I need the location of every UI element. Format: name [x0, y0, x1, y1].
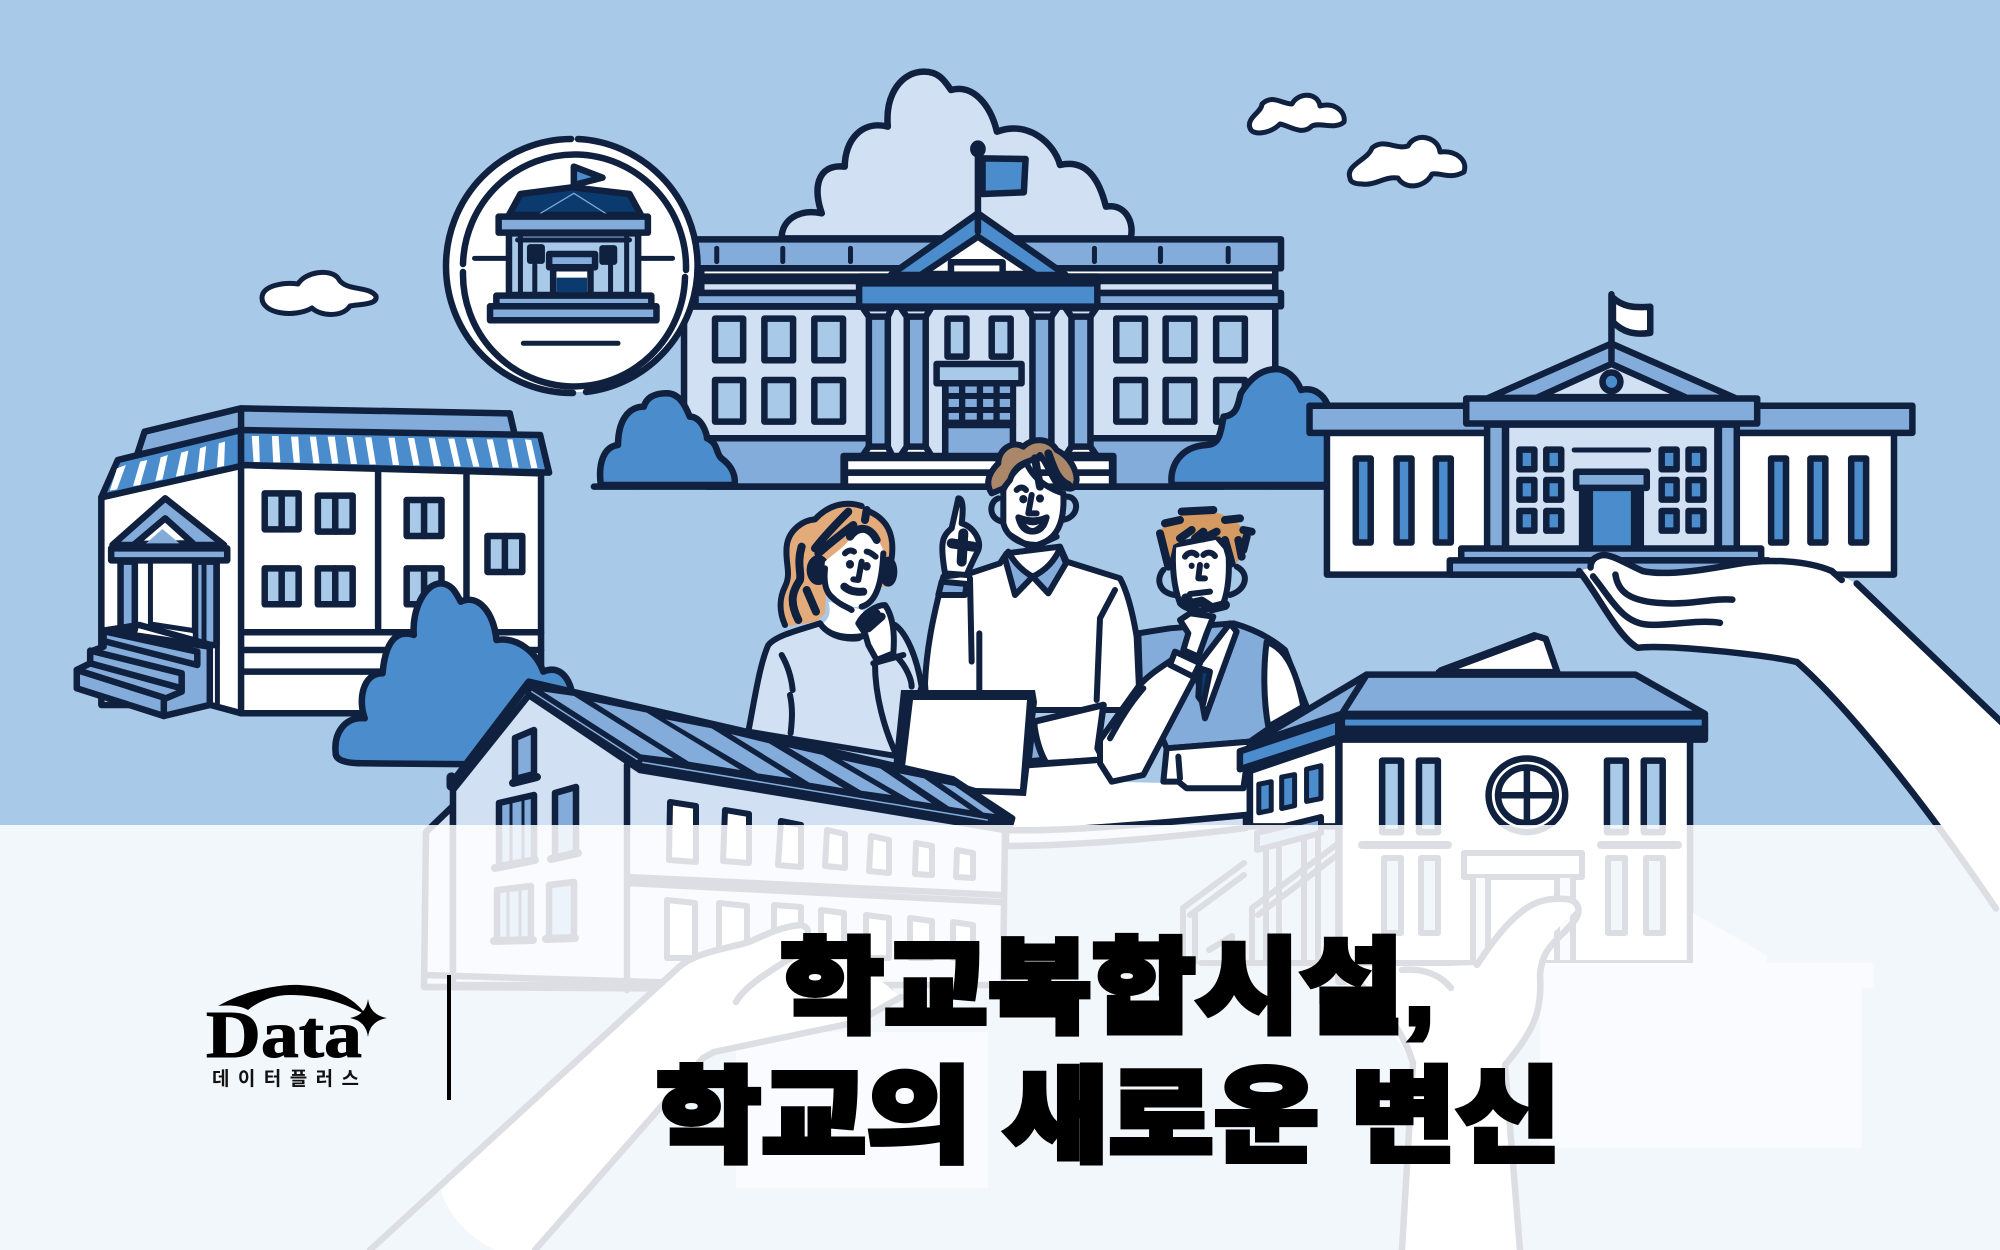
flag [973, 144, 1026, 213]
man cuff [938, 582, 967, 595]
woman hair outline [781, 504, 892, 625]
woman ears [810, 558, 894, 584]
hand left lower [370, 925, 901, 1250]
pale panels under band [736, 913, 1874, 1188]
side windows [667, 802, 973, 958]
hand right lower [1334, 899, 1579, 1250]
ground line [594, 483, 1327, 490]
house with round window [1183, 635, 1705, 982]
front windows [1382, 761, 1663, 832]
woman [748, 504, 922, 757]
portico [859, 213, 1097, 457]
face [1173, 537, 1229, 610]
woman sleeves [782, 655, 912, 752]
porch [111, 498, 227, 703]
roof [1250, 675, 1705, 744]
badge: school icon in circle [446, 139, 700, 393]
windows [715, 319, 1245, 422]
arm [1100, 660, 1195, 782]
title line 1: 학교복합시설, [780, 931, 1435, 1047]
title line 2: 학교의 새로운 변신 [656, 1060, 1561, 1176]
logo star [350, 999, 387, 1037]
shirt collar [1197, 623, 1237, 718]
title [656, 931, 1561, 1176]
tie [1198, 668, 1210, 703]
logo [206, 985, 387, 1090]
wings [1327, 433, 1894, 575]
logo divider [447, 975, 451, 1100]
hand holding building [1579, 555, 2000, 908]
flag [1611, 294, 1650, 344]
solar roof [451, 682, 1012, 825]
man sweater [925, 547, 1140, 710]
lower windows and door [1183, 817, 1693, 963]
main school building with cloud [594, 72, 1333, 487]
woman hand [858, 605, 894, 660]
lean-to porch [424, 806, 453, 987]
small clouds [262, 95, 1465, 314]
awning [101, 430, 549, 497]
building body [684, 239, 1281, 487]
back roof sheet [1439, 635, 1557, 672]
table edge [1006, 815, 1246, 846]
door [1576, 472, 1647, 549]
title band overlay [0, 825, 2000, 1250]
man with beard and vest [1100, 510, 1307, 788]
logo subtext: 데이터플러스 [212, 1068, 359, 1090]
logo swoosh [218, 985, 366, 1015]
windows [265, 493, 522, 604]
face features and beard [1185, 553, 1225, 608]
woman hair strands [793, 510, 877, 620]
big cloud [782, 72, 1132, 238]
hair [1160, 510, 1247, 567]
round window [1489, 759, 1565, 832]
center block [1466, 344, 1757, 550]
man with pointing finger [925, 440, 1140, 710]
front wall [1339, 739, 1690, 982]
side wall [1250, 741, 1339, 826]
man hair [988, 440, 1077, 493]
man face features [1010, 487, 1057, 545]
right school building [1310, 294, 1912, 575]
woman face features [844, 551, 876, 592]
logo wordmark: Data [206, 998, 362, 1072]
man face [1003, 463, 1064, 545]
left school building [77, 408, 571, 765]
vest [1138, 623, 1307, 748]
house walls [453, 695, 1005, 985]
bush right of main building [1171, 369, 1333, 485]
woman sweater [748, 623, 922, 757]
ears [1159, 567, 1245, 595]
walls [101, 465, 541, 713]
hand [1180, 613, 1213, 657]
gable windows [494, 730, 578, 941]
shirt hem [1163, 742, 1250, 788]
solar house [424, 682, 1012, 990]
bush left of main building [600, 393, 735, 485]
side windows [1259, 766, 1321, 813]
badge building icon [475, 258, 673, 343]
steps [844, 456, 1113, 487]
porch steps [77, 625, 211, 716]
woman hair [780, 504, 893, 627]
woman neck [823, 602, 863, 636]
man sweater lines [970, 578, 1115, 700]
wing windows [1356, 459, 1866, 542]
cuff [1170, 652, 1200, 677]
man ears [991, 497, 1076, 522]
side porch [1257, 817, 1321, 850]
steps [1450, 549, 1768, 575]
big bush [335, 583, 571, 765]
table and forearm [977, 705, 1250, 832]
fascia [1342, 716, 1705, 729]
man collar [1005, 548, 1066, 595]
right sleeve [1264, 642, 1303, 727]
man hand [942, 498, 979, 575]
center windows [1519, 450, 1703, 531]
roof [137, 408, 515, 455]
laptop [893, 690, 1037, 796]
woman face [824, 529, 883, 607]
